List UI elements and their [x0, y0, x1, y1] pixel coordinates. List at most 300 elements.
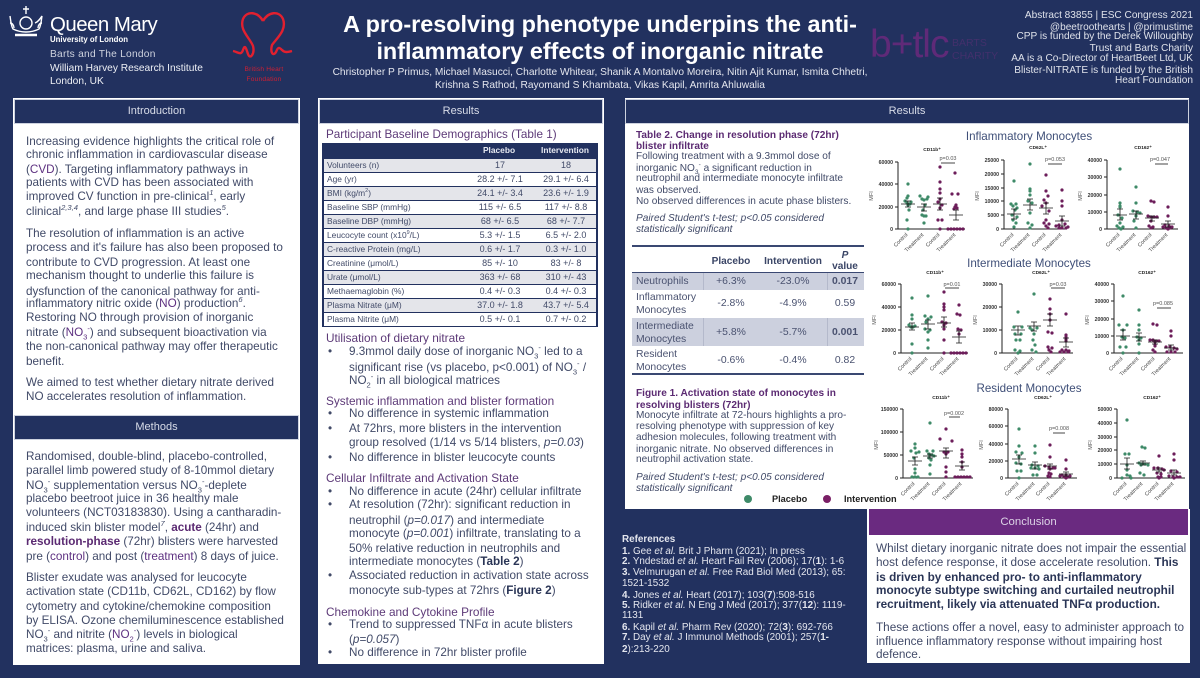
title	[343, 11, 857, 64]
chart: intermediate CD11b: p=0.01	[944, 282, 960, 288]
section: cellular infiltrate and activation state: No difference in acute (24hr) cellular infiltrate	[349, 485, 581, 498]
chart: intermediate CD162: Treatment	[1151, 356, 1173, 378]
heading: Results: Results	[889, 105, 925, 117]
text: abstract and funding notes: Blister-NITRATE is funded by the British	[1014, 65, 1193, 76]
text: table 2 description: Following treatment with a 9.3mmol dose of	[636, 151, 831, 162]
chart: resident CD11b: 100000	[881, 430, 898, 436]
chart: resident CD62L: Control	[1004, 481, 1020, 498]
section: systemic inflammation and blister formation: No difference in systemic inflammation	[349, 407, 549, 420]
text: references: References	[622, 534, 675, 545]
text: methods body: cytometry and cytokine/chemokine composition	[26, 600, 271, 613]
chart: resident CD62L: Treatment	[1015, 481, 1037, 503]
heading: Participant Baseline Demographics: Participant Baseline Demographics (Table 1)	[326, 128, 557, 141]
section: systemic inflammation and blister formation: At 72hrs, more blisters in the intervention	[349, 422, 561, 435]
table 1: baseline demographics: 18	[561, 160, 571, 170]
chart: inflammatory CD62L: Treatment	[1042, 232, 1064, 254]
text: introduction body: The resolution of inflammation is an active	[26, 227, 244, 240]
text: introduction body: improved CV function in pre-clinical1, early	[26, 188, 245, 203]
charts: monocyte activation state scatter plots	[869, 130, 1185, 503]
table 1: baseline demographics: 0.7 +/- 0.2	[546, 314, 586, 324]
chart: inflammatory CD162: Treatment	[1116, 232, 1138, 254]
chart: intermediate CD11b: Treatment	[908, 356, 930, 378]
text: conclusion body: defence.	[876, 648, 921, 661]
chart: inflammatory CD162: Control	[1137, 232, 1153, 249]
table 1: baseline demographics: Methaemaglobin (%)	[327, 286, 404, 296]
text: British Heart Foundation: Foundation	[246, 76, 282, 82]
chart: inflammatory CD162: 30000	[1088, 175, 1102, 181]
chart: inflammatory CD162: Treatment	[1148, 232, 1170, 254]
chart: intermediate CD162: 20000	[1095, 317, 1109, 323]
chart: resident CD62L: 60000	[989, 424, 1003, 430]
section: utilisation of dietary nitrate	[326, 331, 586, 389]
table 1: baseline demographics: 17	[495, 160, 505, 170]
heading: Conclusion: Conclusion	[1000, 516, 1057, 528]
table 1: baseline demographics: Intervention	[541, 145, 589, 155]
chart: intermediate CD11b: 40000	[882, 305, 896, 311]
text: methods body: activation state (CD11b, CD62L, CD162) by flow	[26, 585, 276, 598]
text: abstract and funding notes: Abstract 83855 | ESC Congress 2021	[1025, 10, 1193, 21]
text: figure 1 description: statistically significant	[636, 483, 732, 494]
chart: resident CD162: 40000	[1098, 421, 1112, 427]
text: Barts Charity: CHARITY	[952, 50, 998, 62]
table 1: baseline demographics: Leucocyte count (x109/L)	[327, 230, 419, 240]
chart: resident CD162: CD162⁺	[1143, 395, 1161, 401]
table 1: baseline demographics: 363 +/- 68	[480, 272, 520, 282]
legend: placebo and intervention	[744, 494, 897, 504]
text: introduction body: process and it's failure has also been proposed to	[26, 241, 283, 254]
chart: resident CD162	[1088, 395, 1185, 503]
text: London, UK: London, UK	[50, 76, 104, 87]
text: conclusion body: is driven by enhanced pro- to anti-inflammatory	[876, 571, 1142, 584]
chart: intermediate CD11b: Control	[897, 356, 913, 373]
section: systemic inflammation and blister formation: No difference in blister leucocyte counts	[349, 451, 555, 464]
table 1: baseline demographics: 0.4 +/- 0.3	[546, 286, 586, 296]
chart: inflammatory CD62L: 25000	[985, 158, 999, 164]
chart: intermediate CD162: Treatment	[1119, 356, 1141, 378]
table 1: baseline demographics: 85 +/- 10	[482, 258, 518, 268]
chart: intermediate CD162: p=0.085	[1153, 301, 1173, 307]
chart: inflammatory CD62L: MFI	[975, 191, 981, 201]
text: methods body: placebo beetroot juice in 36 healthy male	[26, 492, 238, 505]
text: references: 1131	[622, 610, 643, 621]
text: introduction body: Increasing evidence highlights the critical role of	[26, 135, 274, 148]
chart: inflammatory CD162: 20000	[1088, 193, 1102, 199]
table 1: baseline demographics: C-reactive Protein (mg/L)	[327, 244, 421, 254]
icon: BHF heart with ECG trace	[232, 12, 292, 58]
chart: resident CD62L: CD62L⁺	[1034, 395, 1052, 401]
text: table 2 description: Paired Student's t-test; p<0.05 considered	[636, 213, 824, 224]
section: cellular infiltrate and activation state: neutrophil (p=0.017) and intermediate	[349, 514, 544, 527]
section: cellular infiltrate and activation state: •	[328, 569, 332, 582]
text: conclusion body: monocyte subtype switching and curtailed neutrophil	[876, 584, 1174, 597]
table 2: change in resolution phase blister infiltrate: 0.017	[832, 276, 858, 287]
chart: resident CD62L: p=0.008	[1049, 426, 1069, 432]
text: figure 1 description: Monocyte infiltrate at 72-hours highlights a pro-	[636, 410, 846, 421]
chart: resident CD11b: Control	[931, 481, 947, 498]
text: introduction body	[26, 135, 283, 403]
chart: resident CD11b: Control	[900, 481, 916, 498]
panel: introduction	[13, 98, 300, 415]
table 2: change in resolution phase blister infiltrate: P	[842, 250, 848, 261]
section: chemokine and cytokine profile	[326, 605, 573, 659]
chart: inflammatory CD62L: Control	[999, 232, 1015, 249]
section: systemic inflammation and blister formation	[326, 394, 584, 464]
text: conclusion body: Whilst dietary inorganic nitrate does not impair the essential	[876, 542, 1186, 555]
section: chemokine and cytokine profile: Trend to suppressed TNFα in acute blisters	[349, 618, 573, 631]
chart: intermediate CD162: 30000	[1095, 299, 1109, 305]
table 1: baseline demographics: 23.6 +/- 1.9	[543, 188, 589, 198]
table 1: baseline demographics: 5.3 +/- 1.5	[480, 230, 520, 240]
chart: intermediate CD162: 40000	[1095, 282, 1109, 288]
section: cellular infiltrate and activation state: monocyte (p=0.001) infiltrate, translating to a	[349, 527, 581, 540]
text: references: 5. Ridker et al. N Eng J Med (2017); 377(12): 1119-	[622, 600, 846, 611]
legend: placebo and intervention: Intervention	[844, 494, 897, 504]
text: references: 2. Yndestad et al. Heart Fail Rev (2006); 17(1): 1-6	[622, 556, 844, 567]
table 1: baseline demographics: 117 +/- 8.8	[545, 202, 587, 212]
heading: Methods: Methods	[135, 421, 178, 433]
chart: resident CD11b: 50000	[884, 453, 898, 459]
chart: inflammatory CD162: p=0.047	[1150, 157, 1170, 163]
section: chemokine and cytokine profile: No difference in 72hr blister profile	[349, 646, 527, 659]
text: table 2 description: blister infiltrate	[636, 141, 709, 152]
table 1: baseline demographics: 68 +/- 7.7	[547, 216, 585, 226]
heading: Introduction: Introduction	[128, 105, 185, 117]
text: references: 7. Day et al. J Immunol Methods (2001); 257(1-	[622, 632, 829, 643]
text: conclusion body	[876, 542, 1186, 661]
text: introduction body: (CVD). Targeting inflammatory pathways in	[26, 163, 248, 176]
chart: inflammatory CD62L	[975, 145, 1069, 254]
chart: intermediate CD62L: 20000	[983, 305, 997, 311]
text: references	[622, 534, 846, 655]
text: introduction body: the non-canonical pathway may offer therapeutic	[26, 340, 278, 353]
text: abstract and funding notes: Heart Foundation	[1115, 75, 1193, 86]
text: figure 1 description: neutrophil activation state.	[636, 454, 753, 465]
table 2: change in resolution phase blister infiltrate: Monocytes	[636, 304, 686, 316]
chart: resident CD62L	[979, 395, 1077, 503]
text: British Heart Foundation: British Heart	[245, 66, 283, 73]
text: introduction body: nitrate (NO3-) and subsequent bioactivation via	[26, 324, 267, 341]
chart: intermediate CD11b: 60000	[882, 282, 896, 288]
table 1: baseline demographics: Creatinine (μmol/L)	[327, 258, 398, 268]
section: cellular infiltrate and activation state	[326, 471, 589, 597]
chart: inflammatory CD11b: 60000	[879, 160, 893, 166]
authors: Krishna S Rathod, Rayomand S Khambata, Vikas Kapil, Amrita Ahluwalia	[435, 80, 765, 91]
text: abstract and funding notes: @beetroothearts | @primustime	[1050, 22, 1193, 33]
chart: inflammatory CD11b: 0	[890, 227, 893, 233]
table 1: baseline demographics	[322, 143, 598, 327]
chart: inflammatory CD11b: 40000	[879, 182, 893, 188]
table 2: change in resolution phase blister infiltrate: value	[832, 261, 858, 272]
chart: intermediate CD11b: 20000	[882, 328, 896, 334]
table 1: baseline demographics: 115 +/- 6.5	[479, 202, 521, 212]
chart: intermediate CD11b: Treatment	[939, 356, 961, 378]
chart: intermediate CD162: Control	[1108, 356, 1124, 373]
table 2: change in resolution phase blister infiltrate: -0.6%	[717, 355, 745, 366]
table 2: change in resolution phase blister infiltrate: Resident	[636, 349, 677, 360]
text: methods body	[26, 450, 284, 655]
chart: resident CD62L: 80000	[989, 407, 1003, 413]
chart: intermediate CD162: 0	[1106, 351, 1109, 357]
chart: inflammatory CD11b: Treatment	[936, 232, 958, 254]
chart: inflammatory CD162: CD162⁺	[1134, 145, 1152, 151]
table 2: change in resolution phase blister infiltrate: Placebo	[712, 256, 750, 267]
text: methods body: NO3- supplementation versus NO3--deplete	[26, 477, 247, 494]
table 2: change in resolution phase blister infiltrate: -0.4%	[779, 355, 807, 366]
chart: intermediate CD62L	[973, 270, 1073, 378]
text: introduction body: We aimed to test whether dietary nitrate derived	[26, 376, 274, 389]
table 1: baseline demographics: 28.2 +/- 7.1	[477, 174, 523, 184]
chart: inflammatory CD62L: 10000	[985, 199, 999, 205]
text: methods body: Blister exudate was analysed for leucocyte	[26, 571, 247, 584]
table 2: change in resolution phase blister infiltrate: +5.8%	[716, 327, 746, 338]
chart: resident CD162: Control	[1112, 481, 1128, 498]
text: references: 4. Jones et al. Heart (2017); 103(7):508-516	[622, 590, 815, 601]
table 2: change in resolution phase blister infiltrate: -2.8%	[717, 298, 745, 309]
panel: results (table 2 and figure 1)	[625, 98, 1189, 509]
table 2: change in resolution phase blister infiltrate: Monocytes	[636, 334, 686, 344]
section: cellular infiltrate and activation state: •	[328, 485, 332, 498]
section: chemokine and cytokine profile: •	[328, 618, 332, 631]
chart: resident CD11b: 0	[895, 476, 898, 482]
text: figure 1 description	[636, 388, 846, 494]
panel: results (demographics and findings)	[318, 98, 604, 664]
chart: resident CD11b	[874, 395, 973, 503]
text: methods body: NO3- and nitrite (NO2-) levels in biological	[26, 626, 238, 643]
text: table 2 description: inorganic NO3- a significant reduction in	[636, 162, 812, 176]
chart: inflammatory CD162: 40000	[1088, 158, 1102, 164]
chart: inflammatory CD62L: Control	[1031, 232, 1047, 249]
table 1: baseline demographics: 310 +/- 43	[546, 272, 586, 282]
chart: inflammatory CD11b: Treatment	[904, 232, 926, 254]
text: introduction body: dysfunction of the canonical pathway for anti-	[26, 285, 260, 298]
chart: inflammatory CD162: MFI	[1078, 191, 1084, 201]
table 1: baseline demographics: 0.3 +/- 1.0	[546, 244, 586, 254]
chart: resident CD162: 50000	[1098, 407, 1112, 413]
text: introduction body: clinical2,3,4, and large phase III studies5.	[26, 203, 229, 218]
text: introduction body: NO accelerates resolution of inflammation.	[26, 390, 246, 403]
chart: resident CD62L: Treatment	[1046, 481, 1068, 503]
table 1: baseline demographics: 6.5 +/- 2.0	[546, 230, 586, 240]
table 1: baseline demographics: 29.1 +/- 6.4	[543, 174, 589, 184]
table 1: baseline demographics: Urate (μmol/L)	[327, 272, 381, 282]
chart: inflammatory CD62L: 15000	[985, 186, 999, 192]
text: introduction body: chronic inflammation in cardiovascular disease	[26, 148, 268, 161]
chart: resident CD162: Control	[1144, 481, 1160, 498]
chart: inflammatory CD62L: p=0.053	[1045, 157, 1065, 163]
chart: intermediate CD62L: 10000	[983, 328, 997, 334]
chart: resident CD11b: Treatment	[942, 481, 964, 503]
chart: inflammatory CD11b: MFI	[869, 191, 875, 201]
text: British Heart Foundation	[245, 66, 284, 82]
text: methods body: matrices: plasma, urine and saliva.	[26, 642, 206, 655]
text: table 2 description: statistically significant	[636, 224, 732, 235]
table 2: change in resolution phase blister infiltrate: -5.7%	[779, 327, 807, 338]
title: inflammatory effects of inorganic nitrate	[376, 38, 824, 64]
heading: Results	[319, 99, 603, 124]
icon: Queen Mary crown	[9, 6, 43, 36]
chart: intermediate CD62L: Treatment	[1014, 356, 1036, 378]
text: introduction body: inflammatory nitric oxide (NO) production6.	[26, 295, 246, 310]
table 1: baseline demographics: Plasma Nitrite (μM)	[327, 314, 399, 324]
text: figure 1 description: Paired Student's t-test; p<0.05 considered	[636, 472, 824, 483]
authors: Christopher P Primus, Michael Masucci, Charlotte Whitear, Shanik A Montalvo Moreira, Nitin Ajit Kumar, Ismita Chhetri,	[333, 67, 867, 78]
chart: inflammatory CD62L: 0	[996, 227, 999, 233]
text: introduction body: Restoring NO through provision of inorganic	[26, 311, 253, 324]
chart: inflammatory CD62L: 5000	[987, 213, 999, 219]
table 2: change in resolution phase blister infiltrate: Monocytes	[636, 362, 686, 372]
chart: inflammatory CD162: Control	[1105, 232, 1121, 249]
logo: British Heart Foundation	[232, 12, 292, 82]
table 1: baseline demographics: BMI (kg/m2)	[327, 188, 371, 198]
chart: intermediate CD62L: p=0.03	[1050, 282, 1066, 288]
text: University of London: University of London	[50, 35, 128, 44]
text: methods body: Randomised, double-blind, placebo-controlled,	[26, 450, 267, 463]
text: abstract and funding notes: Trust and Barts Charity	[1090, 43, 1193, 54]
table 2: change in resolution phase blister infiltrate: -23.0%	[777, 276, 809, 287]
chart: intermediate CD162: 10000	[1095, 334, 1109, 340]
heading: Conclusion	[869, 509, 1188, 535]
text: figure 1 description: Figure 1. Activation state of monocytes in	[636, 388, 836, 399]
heading: Introduction	[14, 99, 299, 124]
table 1: baseline demographics: Baseline DBP (mmHg)	[327, 216, 411, 226]
chart: resident CD11b: Treatment	[910, 481, 932, 503]
chart: intermediate CD62L: CD62L⁺	[1032, 270, 1050, 276]
chart: inflammatory CD62L: 20000	[985, 172, 999, 178]
table 2: change in resolution phase blister infiltrate: Intervention	[764, 256, 822, 267]
text: methods body: by ELISA. Ozone chemiluminescence established	[26, 614, 284, 627]
section: cellular infiltrate and activation state: Cellular Infiltrate and Activation State	[326, 471, 519, 485]
title: A pro-resolving phenotype underpins the anti-	[343, 11, 857, 37]
text: figure 1 description: inorganic nitrate. No observed differences in	[636, 444, 833, 455]
section: utilisation of dietary nitrate: Utilisation of dietary nitrate	[326, 331, 465, 345]
section: cellular infiltrate and activation state: 50% relative reduction in neutrophils and	[349, 542, 560, 555]
chart: resident CD11b: p=0.002	[944, 411, 964, 417]
text: Barts Charity: BARTS	[952, 37, 987, 49]
chart: intermediate CD62L: Control	[1035, 356, 1051, 373]
table 2: change in resolution phase blister infiltrate: -4.9%	[779, 298, 807, 309]
table 2: change in resolution phase blister infiltrate: Neutrophils	[636, 276, 689, 287]
chart: resident CD62L: 0	[1000, 476, 1003, 482]
chart: inflammatory CD162	[1078, 145, 1178, 254]
text: methods body: induced skin blister model7, acute (24hr) and	[26, 519, 259, 534]
chart: intermediate CD62L: MFI	[973, 315, 979, 325]
table 1: baseline demographics: 43.7 +/- 5.4	[543, 300, 589, 310]
section: cellular infiltrate and activation state: monocyte sub-types at 72hrs (Figure 2)	[349, 584, 556, 597]
table 1: baseline demographics: Volunteers (n)	[327, 160, 379, 170]
heading: Methods	[14, 415, 299, 440]
chart: intermediate CD11b: 0	[893, 351, 896, 357]
section: utilisation of dietary nitrate: NO2- in all biological matrices	[349, 372, 500, 389]
text: conclusion body: These actions offer a novel, easy to administer approach to	[876, 621, 1184, 634]
table 2: change in resolution phase blister infiltrate: Inflammatory	[636, 292, 696, 303]
text: references: 6. Kapil et al. Pharm Rev (2020); 72(3): 692-766	[622, 622, 833, 633]
text: table 2 description: Table 2. Change in resolution phase (72hr)	[636, 130, 839, 141]
text: abstract and funding notes: CPP is funded by the Derek Willoughby	[1016, 31, 1193, 42]
chart: intermediate CD162: Control	[1140, 356, 1156, 373]
text: abstract and funding notes: AA is a Co-Director of HeartBeet Ltd, UK	[1011, 53, 1193, 64]
chart: intermediate CD62L: Control	[1003, 356, 1019, 373]
section: systemic inflammation and blister formation: •	[328, 407, 332, 420]
text: table 2 description: neutrophil and intermediate monocyte infiltrate	[636, 173, 843, 184]
chart: intermediate CD162: MFI	[1085, 315, 1091, 325]
text: conclusion body: host defence response, it dose accelerate resolution. This	[876, 556, 1178, 569]
chart: inflammatory CD11b: CD11b⁺	[923, 147, 941, 153]
table 2: change in resolution phase blister infiltrate: 0.59	[835, 298, 855, 309]
heading: Intermediate Monocytes: Intermediate Monocytes	[967, 257, 1091, 270]
chart: resident CD162: Treatment	[1123, 481, 1145, 503]
chart: resident CD162: MFI	[1088, 440, 1094, 450]
text: figure 1 description: resolving blisters (72hr)	[636, 400, 750, 411]
table 1: baseline demographics: 37.0 +/- 1.8	[477, 300, 523, 310]
chart: resident CD11b: 150000	[881, 407, 898, 413]
text: table 2 description	[636, 130, 851, 235]
table 1: baseline demographics: Placebo	[483, 145, 515, 155]
chart: inflammatory CD11b: p=0.03	[940, 156, 956, 162]
text: introduction body: benefit.	[26, 355, 64, 368]
section: utilisation of dietary nitrate: significant rise (vs placebo, p<0.001) of NO3- /	[349, 359, 586, 376]
chart: resident CD162: 20000	[1098, 448, 1112, 454]
table 1: baseline demographics: Age (yr)	[327, 174, 357, 184]
text: table 2 description: No observed differences in acute phase blisters.	[636, 196, 851, 207]
text: references: 3. Velmurugan et al. Free Rad Biol Med (2013); 65:	[622, 567, 845, 578]
chart: inflammatory CD11b: Control	[925, 232, 941, 249]
chart: intermediate CD11b: MFI	[872, 315, 878, 325]
section: cellular infiltrate and activation state: intermediate monocytes (Table 2)	[349, 555, 524, 568]
panel: conclusion	[867, 509, 1190, 663]
table 1: baseline demographics: 68 +/- 6.5	[481, 216, 519, 226]
text: introduction body: contribute to CVD progression. At least one	[26, 256, 250, 269]
chart: resident CD162: 30000	[1098, 435, 1112, 441]
chart: inflammatory CD162: 0	[1099, 227, 1102, 233]
section: systemic inflammation and blister formation: •	[328, 422, 332, 435]
text: introduction body: mechanism thought to underlie this failure is	[26, 269, 254, 282]
text: methods body: volunteers (NCT03183830). Using a cantharadin-	[26, 506, 281, 519]
heading: Resident Monocytes: Resident Monocytes	[976, 382, 1082, 395]
table 2: change in resolution phase blister infiltrate: 0.001	[832, 327, 858, 338]
table 1: baseline demographics: 0.4 +/- 0.3	[480, 286, 520, 296]
section: systemic inflammation and blister formation: Systemic inflammation and blister formation	[326, 394, 554, 408]
text: references: 1. Gee et al. Brit J Pharm (2021); In press	[622, 546, 805, 557]
chart: inflammatory CD11b	[869, 147, 965, 254]
legend: placebo and intervention: Placebo	[772, 494, 807, 504]
chart: inflammatory CD11b: Control	[893, 232, 909, 249]
chart: intermediate CD11b: CD11b⁺	[926, 270, 944, 276]
section: chemokine and cytokine profile: Chemokine and Cytokine Profile	[326, 605, 495, 619]
chart: intermediate CD11b	[872, 270, 968, 378]
text: William Harvey Research Institute: William Harvey Research Institute	[50, 63, 203, 74]
authors	[333, 67, 867, 91]
table 2: change in resolution phase blister infiltrate: Intermediate	[636, 321, 694, 332]
heading: Results	[625, 99, 1189, 124]
table 1: baseline demographics: 83 +/- 8	[551, 258, 581, 268]
chart: intermediate CD62L: 30000	[983, 282, 997, 288]
table 2: change in resolution phase blister infiltrate	[632, 245, 864, 375]
logo: b+tlc Barts Charity	[870, 23, 998, 66]
chart: resident CD62L: 40000	[989, 442, 1003, 448]
table 2: change in resolution phase blister infiltrate: 0.82	[835, 355, 855, 366]
heading: Results: Results	[443, 105, 479, 117]
chart: resident CD62L: MFI	[979, 440, 985, 450]
section: cellular infiltrate and activation state: •	[328, 498, 332, 511]
text: figure 1 description: resolving phenotype with suppression of key	[636, 421, 834, 432]
chart: resident CD11b: MFI	[874, 440, 880, 450]
table 1: baseline demographics: 24.1 +/- 3.4	[477, 188, 523, 198]
text: conclusion body: influence inflammatory response without impairing host	[876, 635, 1162, 648]
chart: resident CD11b: CD11b⁺	[932, 395, 950, 401]
text: b+tlc: b+tlc	[870, 23, 948, 66]
chart: intermediate CD162: CD162⁺	[1138, 270, 1156, 276]
chart: intermediate CD62L: 0	[994, 351, 997, 357]
